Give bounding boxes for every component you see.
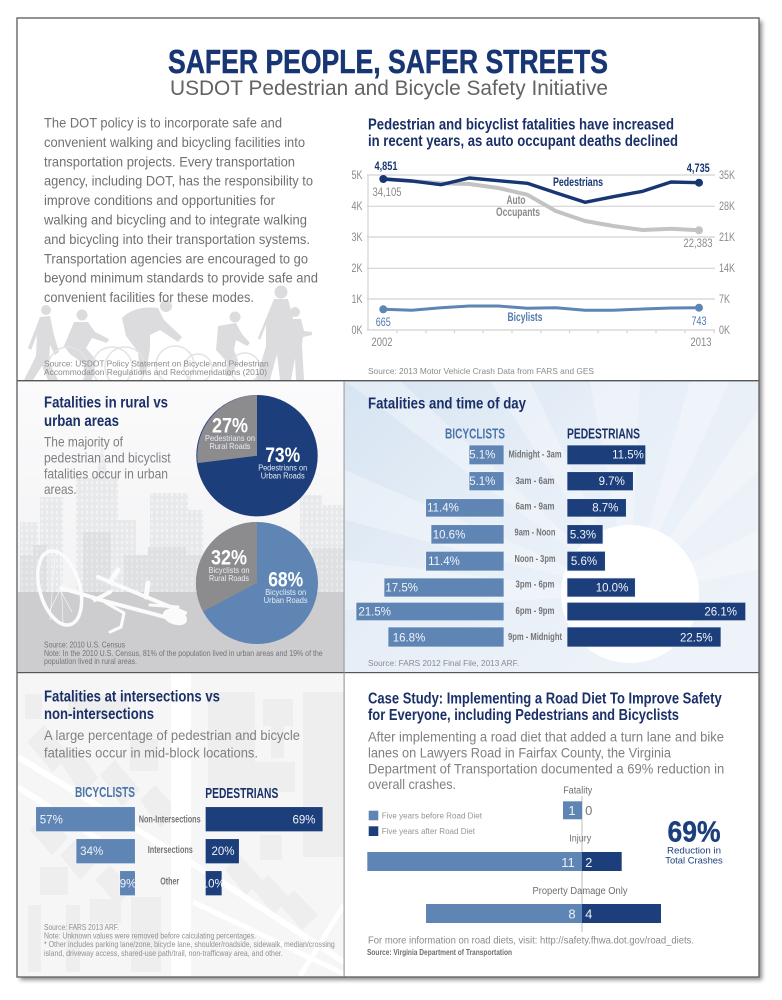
source: FARS intersections: Note: Unknown values were removed before calculating percentages.	[44, 931, 256, 941]
chart value labels: 2002	[372, 337, 392, 349]
text: majority	[44, 434, 171, 497]
chart value labels: 4,851	[374, 161, 398, 173]
time labels	[508, 450, 563, 643]
text: mid-block: A large percentage of pedestrian and bicycle	[44, 727, 300, 743]
text block: DOT policy: improve conditions and opportunities for	[44, 192, 275, 208]
source: census: Source: 2010 U.S. Census	[44, 640, 125, 650]
chart value labels: Occupants	[496, 207, 540, 219]
bar values: bicyclists	[358, 450, 495, 645]
left axis labels: 1K	[352, 292, 362, 306]
pie chart: bicyclists: Rural Roads	[209, 573, 249, 583]
heading: intersections: Fatalities at intersections vs	[44, 689, 220, 706]
text: mid-block	[44, 727, 300, 760]
callout: 69% reduction: 69%	[668, 817, 721, 849]
bar values: 20%	[211, 846, 235, 858]
title: SAFER PEOPLE, SAFER STREETS	[168, 44, 608, 81]
bar values: pedestrians: 10.0%	[596, 583, 628, 595]
bar values: 69%	[292, 814, 316, 826]
text block: DOT policy: agency, including DOT, has the responsibility to	[44, 173, 313, 189]
pie chart: pedestrians: 27%	[212, 414, 248, 437]
text: mid-block: fatalities occur in mid-block locations.	[44, 744, 258, 760]
time labels: Noon - 3pm	[514, 554, 556, 565]
pie chart: bicyclists: Bicyclists on	[208, 565, 250, 575]
pie chart: bicyclists: 32%	[211, 546, 247, 569]
pie chart: pedestrians: Rural Roads	[210, 441, 250, 451]
series: pedestrians	[379, 175, 703, 202]
icon: child walker silhouette	[288, 307, 312, 380]
time labels: 6pm - 9pm	[516, 606, 555, 617]
callout: 69% reduction: Reduction in	[667, 845, 721, 856]
panel: rural vs urban	[44, 394, 323, 666]
legend	[369, 811, 483, 836]
time labels: 9pm - Midnight	[508, 632, 563, 643]
panel: intersections background map	[18, 673, 344, 976]
bars: bicyclists	[36, 807, 135, 896]
icon: fallen bicycle	[30, 546, 189, 632]
text: case study: Department of Transportation documented a 69% reduction in	[368, 760, 724, 776]
bar values: pedestrians: 11.5%	[612, 450, 644, 462]
text block: DOT policy: convenient facilities for these modes.	[44, 289, 254, 305]
heading: time of day: Fatalities and time of day	[368, 395, 526, 412]
location labels	[139, 814, 201, 887]
pie chart: bicyclists: Urban Roads	[264, 595, 308, 605]
column heading: bicyclists: BICYCLISTS	[445, 425, 505, 442]
column heading: pedestrians: PEDESTRIANS	[205, 785, 278, 802]
bar values: 57%	[40, 814, 63, 826]
source: census: Note: In the 2010 U.S. Census, 81% of the population lived in urban areas and 19% of the	[44, 648, 323, 658]
bar chart: road diet: 4	[585, 906, 592, 921]
bar chart: road diet: 0	[585, 803, 592, 818]
text: case study: After implementing a road diet that added a turn lane and bike	[368, 729, 724, 745]
left axis labels: 5K	[352, 168, 362, 182]
panel: time of day	[356, 395, 746, 668]
heading: case study	[368, 690, 722, 724]
chart value labels	[372, 161, 712, 349]
pie chart: bicyclists: Bicyclists on	[265, 587, 306, 597]
callout: 69% reduction	[665, 817, 723, 866]
icon: adult walker silhouette	[256, 286, 293, 380]
bar chart: road diet: 2	[585, 855, 592, 870]
bar values: 10%	[202, 879, 225, 891]
bar values: 34%	[80, 846, 103, 858]
location labels: Intersections	[148, 845, 193, 856]
title: USDOT Pedestrian and Bicycle Safety Initiative	[170, 77, 608, 100]
time labels: 9am - Noon	[514, 528, 556, 539]
pie chart: pedestrians: Pedestrians on	[258, 462, 307, 472]
text block: DOT policy: convenient walking and bicycling facilities into	[44, 134, 305, 150]
bars: pedestrians	[567, 445, 746, 647]
text: more information: For more information on road diets, visit: http://safety.fhwa.dot.gov/road_diets.	[368, 935, 694, 946]
bar values: pedestrians	[570, 450, 737, 645]
pie chart: pedestrians: Pedestrians on	[205, 433, 255, 443]
source: policy: Accommodation Regulations and Recommendations (2010)	[44, 367, 267, 377]
heading: rural vs urban: Fatalities in rural vs	[44, 394, 168, 411]
chart value labels: 34,105	[372, 187, 402, 199]
text block: DOT policy: The DOT policy is to incorporate safe and	[44, 114, 282, 130]
text block: DOT policy: transportation projects. Every transportation	[44, 153, 295, 169]
dividers	[17, 380, 759, 977]
right axis labels: 0K	[719, 323, 730, 337]
right axis labels: 21K	[719, 230, 735, 244]
location labels: Other	[160, 876, 179, 887]
column heading: pedestrians: PEDESTRIANS	[567, 425, 640, 442]
text: majority: areas.	[44, 481, 77, 497]
heading: rural vs urban	[44, 394, 168, 430]
bars: bicyclists	[356, 445, 504, 647]
map blocks	[252, 884, 256, 888]
time labels: 6am - 9am	[516, 502, 555, 513]
bar chart: road diet: 11	[561, 855, 575, 870]
left axis labels	[352, 168, 362, 337]
text: majority: fatalities occur in urban	[44, 465, 168, 481]
source: FARS intersections: Source: FARS 2013 ARF.	[44, 922, 119, 932]
chart value labels: Pedestrians	[553, 177, 603, 189]
time labels: 3am - 6am	[516, 476, 555, 487]
text: majority: pedestrian and bicyclist	[44, 450, 171, 466]
heading: fatalities trend	[368, 116, 678, 150]
bar values: bicyclists: 17.5%	[385, 583, 418, 595]
icon: cyclist silhouette one	[48, 310, 132, 387]
heading: intersections	[44, 689, 220, 723]
text block: DOT policy	[43, 114, 318, 305]
right axis labels: 14K	[719, 261, 735, 275]
right axis labels: 35K	[719, 168, 735, 182]
source: policy	[44, 359, 269, 377]
source: FARS intersections	[44, 922, 335, 958]
chart value labels: 665	[376, 317, 391, 329]
bar values: bicyclists: 11.4%	[428, 556, 460, 568]
bar values: bicyclists: 21.5%	[358, 607, 391, 619]
bar values: pedestrians: 5.6%	[571, 556, 597, 568]
sun rays	[345, 382, 546, 610]
right axis labels: 7K	[719, 292, 730, 306]
series: auto occupants	[383, 179, 703, 234]
sun circle	[561, 525, 699, 663]
left axis labels: 0K	[352, 323, 362, 337]
chart value labels: 4,735	[687, 163, 710, 175]
bars: pedestrians	[205, 807, 323, 896]
source: FARS time: Source: FARS 2012 Final File, 2013 ARF.	[368, 658, 519, 668]
source: chart: Source: 2013 Motor Vehicle Crash Data from FARS and GES	[368, 366, 594, 376]
bar values: pedestrians: 26.1%	[704, 607, 737, 619]
legend: Five years before Road Diet	[382, 811, 483, 821]
text block: DOT policy: walking and bicycling and to integrate walking	[43, 212, 307, 228]
pie chart: pedestrians: Urban Roads	[261, 470, 305, 480]
bar values: pedestrians: 9.7%	[599, 476, 625, 488]
left axis labels: 4K	[352, 199, 362, 213]
icon: cyclist silhouette three	[184, 312, 260, 383]
bar chart: road diet: 1	[568, 803, 576, 818]
left axis labels: 2K	[352, 261, 362, 275]
left axis labels: 3K	[352, 230, 362, 244]
line chart	[352, 161, 735, 349]
heading: case study: for Everyone, including Pedestrians and Bicyclists	[368, 707, 679, 724]
text block: DOT policy: and bicycling into their transportation systems.	[44, 231, 310, 247]
panel: time of day background	[345, 381, 759, 672]
text block: DOT policy: Transportation agencies are encouraged to go	[44, 250, 308, 266]
map roads	[18, 673, 344, 976]
panel: intersections	[36, 689, 335, 958]
bar values: pedestrians: 22.5%	[680, 633, 713, 645]
bar values: bicyclists: 10.6%	[433, 529, 465, 541]
legend: Five years after Road Diet	[382, 826, 476, 836]
source: Virginia DOT: Source: Virginia Department of Transportation	[367, 947, 512, 957]
source: census	[44, 640, 323, 666]
ground	[18, 592, 344, 672]
pie chart: pedestrians	[196, 395, 318, 516]
skyline	[20, 445, 344, 592]
bar values: bicyclists: 5.1%	[469, 476, 495, 488]
bar values: pedestrians: 8.7%	[592, 502, 618, 514]
right axis labels	[719, 168, 735, 337]
bar values	[40, 814, 316, 891]
bar values: bicyclists: 5.1%	[469, 450, 495, 462]
text: case study	[368, 729, 724, 792]
heading: fatalities trend: Pedestrian and bicyclist fatalities have increased	[368, 116, 674, 133]
title	[168, 44, 608, 100]
bar chart: road diet: Property Damage Only	[532, 886, 628, 897]
series: bicyclists	[379, 304, 703, 313]
heading: intersections: non-intersections	[44, 706, 154, 723]
chart value labels: 2013	[690, 337, 712, 349]
bar chart: road diet: 8	[568, 906, 576, 921]
chart value labels: 743	[692, 316, 706, 328]
chart value labels: Auto	[506, 195, 526, 207]
heading: fatalities trend: in recent years, as auto occupant deaths declined	[368, 133, 678, 150]
pie chart: bicyclists: 68%	[268, 569, 303, 592]
time labels: 3pm - 6pm	[516, 579, 555, 590]
location labels: Non-Intersections	[139, 814, 201, 825]
time labels: Midnight - 3am	[508, 450, 562, 461]
chart value labels: Bicylists	[508, 312, 542, 324]
chart value labels: 22,383	[684, 238, 712, 250]
panel: intro background silhouettes	[24, 286, 312, 387]
pie chart: bicyclists	[196, 522, 318, 644]
text: case study: lanes on Lawyers Road in Fairfax County, the Virginia	[368, 744, 671, 760]
text: case study: overall crashes.	[368, 776, 456, 792]
source: FARS intersections: * Other includes parking lane/zone, bicycle lane, shoulder/roadside, sidewalk, median/crossing	[44, 939, 335, 949]
right axis labels: 28K	[719, 199, 735, 213]
heading: rural vs urban: urban areas	[44, 413, 119, 430]
column heading: bicyclists: BICYCLISTS	[75, 784, 135, 801]
source: census: population lived in rural areas.	[44, 656, 137, 666]
text: majority: The majority of	[44, 434, 123, 450]
bar chart: road diet	[367, 785, 661, 932]
bar values: 9%	[120, 879, 136, 891]
bar values: bicyclists: 16.8%	[393, 633, 425, 645]
icon: cyclist silhouette two	[105, 300, 194, 387]
panel: case study	[367, 690, 724, 957]
bar chart: road diet: Fatality	[563, 785, 592, 796]
panel: rural background	[18, 446, 344, 672]
bar chart: road diet: Injury	[569, 834, 591, 845]
text block: DOT policy: beyond minimum standards to provide safe and	[44, 270, 318, 286]
bar values: bicyclists: 11.4%	[427, 502, 459, 514]
callout: 69% reduction: Total Crashes	[665, 855, 723, 866]
pie chart: pedestrians: 73%	[265, 444, 300, 467]
icon: walker silhouette	[24, 305, 59, 380]
source: policy: Source: USDOT Policy Statement on Bicycle and Pedestrian	[44, 359, 269, 369]
bar values: pedestrians: 5.3%	[570, 529, 596, 541]
source: FARS intersections: island, driveway access, shared-use path/trail, non-trafficway area, and other.	[44, 948, 283, 958]
